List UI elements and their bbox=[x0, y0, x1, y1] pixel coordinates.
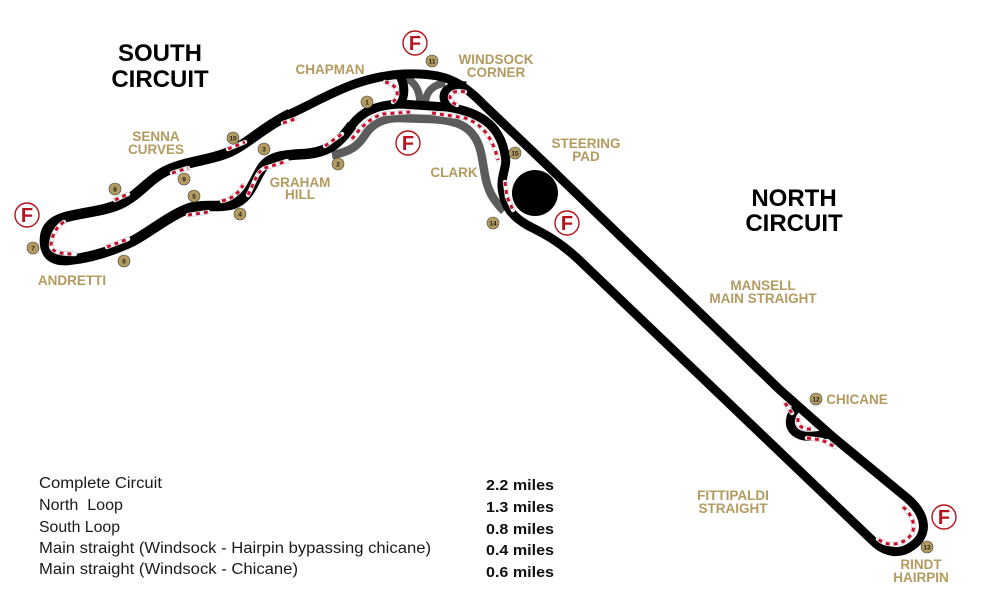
track: Windsock right hairpin bbox=[444, 86, 466, 107]
distance table: miles: 0.4 miles bbox=[486, 542, 554, 559]
distance table: miles: 1.3 miles bbox=[486, 499, 554, 516]
distance table: miles: 0.6 miles bbox=[486, 564, 554, 581]
label: Fittipaldi Straight: FITTIPALDI bbox=[697, 488, 769, 503]
label: Fittipaldi Straight bbox=[697, 488, 769, 516]
numbered corner markers: 13 bbox=[923, 544, 931, 552]
label: Steering Pad bbox=[551, 136, 621, 164]
distance table: miles: 0.8 miles bbox=[486, 521, 554, 538]
flag marker: Andretti bbox=[15, 203, 39, 227]
flag marker: top bbox=[403, 31, 427, 55]
heading: North Circuit: CIRCUIT bbox=[745, 210, 843, 237]
distance table: route names bbox=[39, 475, 431, 578]
heading: North Circuit: NORTH bbox=[751, 185, 837, 212]
label: Graham Hill: HILL bbox=[285, 187, 315, 202]
heading: North Circuit bbox=[745, 185, 843, 237]
flag marker: Clark: F bbox=[402, 133, 414, 155]
numbered corner markers: 2 bbox=[336, 162, 340, 168]
numbered corner markers: 4 bbox=[238, 212, 242, 218]
distance table: route names: North Loop bbox=[39, 497, 123, 514]
track: thicker south section bbox=[45, 114, 352, 260]
label: Mansell Main Straight bbox=[709, 278, 817, 306]
flag marker: Clark bbox=[396, 131, 420, 155]
numbered corner markers: 6 bbox=[122, 258, 126, 266]
label: Rindt Hairpin bbox=[893, 557, 949, 585]
numbered corner markers: 3 bbox=[262, 146, 266, 154]
numbered corner markers: 9 bbox=[182, 176, 186, 184]
distance table: route names: South Loop bbox=[39, 519, 120, 536]
label: Mansell Main Straight: MANSELL bbox=[730, 278, 796, 293]
flag marker: top: F bbox=[409, 33, 421, 55]
distance table: miles: 2.2 miles bbox=[486, 477, 554, 494]
distance table: miles bbox=[486, 477, 554, 581]
label: Graham Hill bbox=[270, 175, 330, 202]
flag marker: hairpin bbox=[932, 505, 956, 529]
label: Steering Pad: STEERING bbox=[551, 136, 621, 151]
heading: South Circuit: CIRCUIT bbox=[111, 66, 209, 93]
distance table: route names: Main straight (Windsock - Hairpin bypassing chicane) bbox=[39, 540, 431, 557]
distance table: route names: Complete Circuit bbox=[39, 475, 163, 492]
label: Senna Curves: CURVES bbox=[128, 142, 184, 157]
label: Mansell Main Straight: MAIN STRAIGHT bbox=[709, 291, 817, 306]
track: chicane loop bbox=[790, 408, 829, 436]
label: Chapman: CHAPMAN bbox=[296, 62, 364, 77]
numbered corner markers: 8 bbox=[113, 186, 117, 194]
heading: South Circuit bbox=[111, 40, 209, 93]
kerbs: red and white run-off strips bbox=[51, 82, 914, 544]
label: Andretti: ANDRETTI bbox=[38, 273, 106, 288]
flag marker: hairpin: F bbox=[938, 507, 950, 529]
numbered corner markers: 10 bbox=[229, 136, 237, 142]
numbered corner markers: 5 bbox=[192, 194, 196, 200]
numbered corner markers: 14 bbox=[489, 220, 497, 228]
label: Clark: CLARK bbox=[430, 165, 478, 180]
label: Windsock Corner bbox=[458, 52, 534, 80]
label: Chicane: CHICANE bbox=[826, 392, 888, 407]
flag marker: Andretti: F bbox=[21, 205, 33, 227]
label: Rindt Hairpin: RINDT bbox=[900, 557, 942, 572]
flag marker: steering pad: F bbox=[561, 213, 573, 235]
numbered corner markers: 15 bbox=[511, 150, 519, 158]
label: Fittipaldi Straight: STRAIGHT bbox=[698, 501, 768, 516]
label: Windsock Corner: WINDSOCK bbox=[458, 52, 534, 67]
flag marker: steering pad bbox=[555, 211, 579, 235]
distance table: route names: Main straight (Windsock - Chicane) bbox=[39, 561, 298, 578]
numbered corner markers: 12 bbox=[812, 396, 820, 404]
label: Senna Curves: SENNA bbox=[132, 129, 180, 144]
steering pad bbox=[512, 170, 558, 216]
label: Rindt Hairpin: HAIRPIN bbox=[893, 570, 949, 585]
label: Steering Pad: PAD bbox=[572, 149, 600, 164]
numbered corner markers bbox=[27, 55, 933, 553]
heading: South Circuit: SOUTH bbox=[118, 40, 202, 67]
numbered corner markers: 7 bbox=[31, 246, 35, 252]
track: Windsock left link bbox=[400, 76, 404, 105]
label: Senna Curves bbox=[128, 129, 184, 157]
label: Graham Hill: GRAHAM bbox=[270, 175, 330, 190]
numbered corner markers: 1 bbox=[365, 100, 369, 106]
track: main black circuit bbox=[45, 74, 923, 552]
numbered corner markers: 11 bbox=[429, 58, 436, 66]
track: grey Clark and Windsock link roads bbox=[332, 78, 504, 211]
label: Windsock Corner: CORNER bbox=[467, 65, 525, 80]
